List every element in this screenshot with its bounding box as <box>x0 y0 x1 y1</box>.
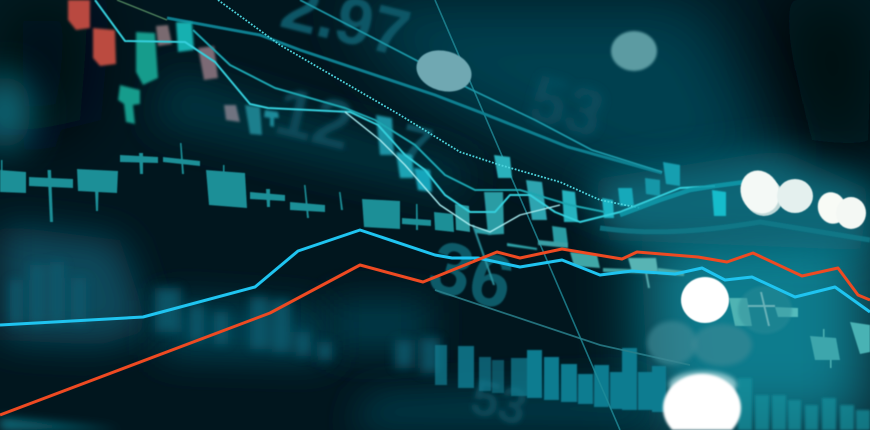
green candlesticks, top left, blurred <box>118 22 194 124</box>
blurred digits: price readouts: 7 <box>393 111 439 179</box>
blurred digits: price readouts: 36 <box>421 224 523 326</box>
crisp candlesticks, row at left <box>0 143 470 232</box>
candlesticks on the descending trend, blurred <box>224 105 432 192</box>
red data line <box>0 249 870 415</box>
red candlesticks, top left, blurred <box>68 0 218 80</box>
candlesticks, lower right <box>729 292 870 368</box>
blurred digits: price readouts <box>268 0 612 430</box>
dotted price line <box>218 0 640 208</box>
blurred digits: price readouts: 53 <box>521 60 612 152</box>
blue data line <box>0 230 870 325</box>
bar chart lower middle <box>435 345 666 412</box>
long diagonal grid lines <box>167 0 690 430</box>
bokeh lights <box>412 31 866 430</box>
background bar chart left, blurred <box>10 262 440 373</box>
bar chart lower right <box>738 378 870 430</box>
cyan moving average lines <box>95 0 870 240</box>
blurred digits: price readouts: 12 <box>268 73 360 165</box>
crisp candlesticks, middle cluster <box>472 155 726 288</box>
